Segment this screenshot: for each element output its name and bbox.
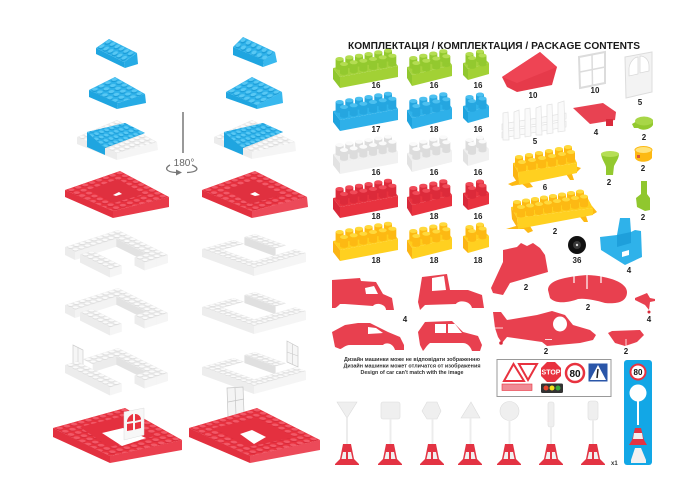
brick: white medium, 16 <box>407 135 452 177</box>
brick: green medium, 16: 16 <box>430 81 439 90</box>
brick: yellow medium, 18: 18 <box>430 256 439 265</box>
brick: red long, 18: 18 <box>372 212 381 221</box>
brick: white long, 16: 16 <box>372 168 381 177</box>
blue panel: assembled sign: 80 <box>634 368 643 377</box>
brick: red medium, 18 <box>407 179 452 221</box>
part: small red roof, 4: 4 <box>594 128 599 137</box>
brick: blue medium, 18: 18 <box>430 125 439 134</box>
part: red roof, 10: 10 <box>529 91 538 100</box>
part: red wing, 2: 2 <box>624 347 629 356</box>
brick: blue long, 17 <box>333 92 398 134</box>
assembly: red frame, right <box>202 171 308 218</box>
part: door, 5: 5 <box>638 98 643 107</box>
sticker: pedestrian crossing <box>588 364 608 382</box>
assembly: second blue block, left <box>89 77 146 109</box>
sticker: stop sign: STOP <box>542 370 561 376</box>
road signs row: hexagon <box>420 402 444 465</box>
brick: red medium, 18: 18 <box>430 212 439 221</box>
sticker: speed limit 80: 80 <box>569 369 581 380</box>
car: suv outline <box>418 321 482 351</box>
assembly: red frame, left <box>65 171 169 218</box>
road signs row: circle <box>497 402 521 465</box>
part: yellow ring, 2 <box>635 146 652 173</box>
brick: blue long, 17: 17 <box>372 125 381 134</box>
note: car design disclaimer: Design of car can't match with the image <box>360 370 464 376</box>
part: door, 5 <box>625 52 652 107</box>
part: red hood, 2 <box>491 243 548 295</box>
part: blue stand, 4 <box>600 218 642 275</box>
assembly: white wall layer one, right <box>202 234 306 276</box>
brick: yellow long, 18: 18 <box>372 256 381 265</box>
label: quantity x1: x1 <box>611 461 618 467</box>
part: blue stand, 4: 4 <box>627 266 632 275</box>
assembly: upper blue block, right <box>233 37 277 67</box>
assembly: white wall layer one, left <box>65 230 168 278</box>
brick: white small, 16: 16 <box>474 168 483 177</box>
assembly: window on wall layer three, left <box>73 345 83 368</box>
brick: green small, 16: 16 <box>474 81 483 90</box>
part: yellow plate with 6 x 2 studs, 6: 6 <box>543 183 548 192</box>
part: red propeller, 4 <box>635 293 655 324</box>
sticker sheet <box>497 360 611 396</box>
assembly: second blue block, right <box>226 77 283 109</box>
part: green funnel, 2: 2 <box>607 178 612 187</box>
sticker: striped bar <box>502 384 532 390</box>
assembly: upper blue block, left <box>96 39 138 68</box>
brick: yellow medium, 18 <box>407 222 452 265</box>
brick: green long, 16: 16 <box>372 81 381 90</box>
part: black wheel, 36 <box>568 236 586 265</box>
sticker: yield triangle <box>519 364 537 380</box>
part: green cap, 2 <box>632 116 653 142</box>
car: jeep outline <box>418 274 484 310</box>
part: yellow plate with 8 x 2 studs, 2 <box>506 190 597 236</box>
brick: yellow small, 18 <box>463 222 489 265</box>
brick: green small, 16 <box>463 50 489 90</box>
part: green funnel, 2 <box>601 151 619 187</box>
brick: blue small, 16: 16 <box>474 125 483 134</box>
assembly: white and blue layer, left <box>77 120 158 160</box>
part: red plane body, 2: 2 <box>544 347 549 356</box>
part: small red roof, 4 <box>573 103 616 137</box>
sticker: traffic light <box>541 384 563 393</box>
sticker: railway warning triangle <box>504 364 524 381</box>
assembly: door above red base, right <box>227 387 244 417</box>
part: red fender, 2 <box>548 274 627 312</box>
brick: red long, 18 <box>333 179 398 221</box>
part: red fender, 2: 2 <box>586 303 591 312</box>
part: window, 10 <box>579 52 605 95</box>
brick: blue medium, 18 <box>407 92 452 134</box>
brick: white medium, 16: 16 <box>430 168 439 177</box>
rotate 180 degrees marker: 180° <box>174 158 194 169</box>
part: black wheel, 36: 36 <box>573 256 582 265</box>
brick: green long, 16 <box>333 49 398 90</box>
car: police car outline <box>332 323 404 350</box>
assembly: white wall layer two, left <box>65 288 168 336</box>
road signs row: rounded bar <box>581 401 605 465</box>
car: truck outline <box>332 278 394 310</box>
part: green bottle, 2: 2 <box>641 213 646 222</box>
assembly: red base with door, left <box>53 408 182 463</box>
assembly: white wall layer two, right <box>202 292 306 334</box>
road signs row: narrow bar <box>539 402 563 465</box>
road signs row: upward triangle <box>458 402 482 465</box>
brick: blue small, 16 <box>463 92 489 134</box>
note: car design disclaimer: Дизайн машинки може не відповідати зображенню <box>344 356 481 363</box>
part: yellow plate with 6 x 2 studs, 6 <box>508 145 581 192</box>
part: fence, 5: 5 <box>533 137 538 146</box>
part: red hood, 2: 2 <box>524 283 529 292</box>
rotate 180 degrees marker <box>167 112 197 176</box>
assembly: white and blue layer, right <box>214 120 296 159</box>
part: window, 10: 10 <box>591 86 600 95</box>
road signs row: triangle <box>335 402 359 465</box>
note: car design disclaimer <box>344 356 481 376</box>
callout: car quantity 4: 4 <box>403 315 408 324</box>
assembly: window on wall layer three, right <box>287 341 298 367</box>
assembly: red base, right <box>189 408 320 463</box>
part: yellow ring, 2: 2 <box>641 164 646 173</box>
brick: red small, 16 <box>463 180 489 221</box>
part: red wing, 2 <box>608 330 644 356</box>
brick: yellow long, 18 <box>333 222 398 265</box>
part: green cap, 2: 2 <box>642 133 647 142</box>
brick: yellow small, 18: 18 <box>474 256 483 265</box>
brick: white small, 16 <box>463 136 489 177</box>
part: green bottle, 2 <box>636 181 650 222</box>
road signs row: square <box>378 402 402 465</box>
brick: green medium, 16 <box>407 49 452 90</box>
part: yellow plate with 8 x 2 studs, 2: 2 <box>553 227 558 236</box>
brick: red small, 16: 16 <box>474 212 483 221</box>
assembly: white wall layer three, right <box>202 352 306 394</box>
part: red roof, 10 <box>502 52 557 100</box>
part: red plane body, 2 <box>493 311 596 356</box>
blue panel: assembled sign <box>624 360 652 465</box>
assembly: white wall layer three, left <box>65 348 168 396</box>
part: fence, 5 <box>502 101 566 146</box>
title: КОМПЛЕКТАЦІЯ / КОМПЛЕКТАЦИЯ / PACKAGE CONTENTS <box>348 40 640 52</box>
note: car design disclaimer: Дизайн машинки может отличатся от изображения <box>344 362 481 370</box>
brick: white long, 16 <box>333 135 398 177</box>
part: red propeller, 4: 4 <box>647 315 652 324</box>
